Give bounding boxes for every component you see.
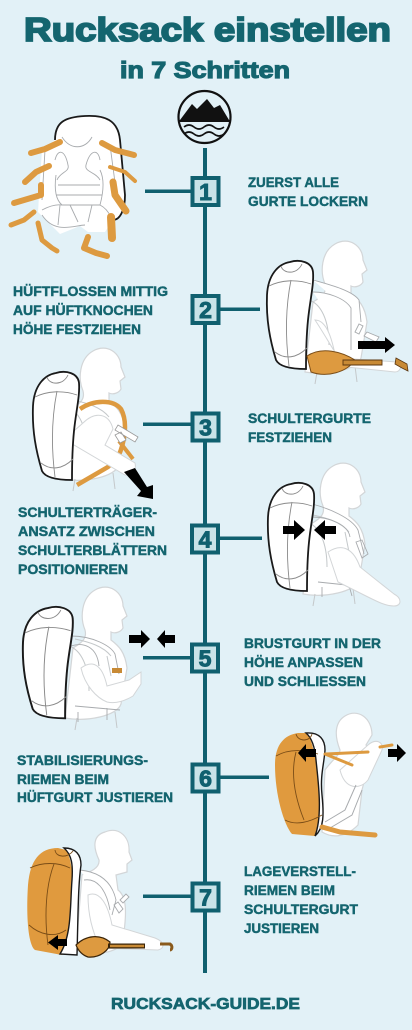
backpack seams [276,734,322,823]
step 1 text [248,175,368,209]
step 7 text: SCHULTERGURT [244,902,359,917]
backpack [268,483,314,591]
straps [312,504,368,597]
arm [328,548,400,606]
step 4 text: SCHULTERTRÄGER- [18,505,157,520]
strap end [380,745,392,747]
step 2 text: HÖHE FESTZIEHEN [13,322,141,337]
figure 7: orange pack and hip stabilizer [27,830,172,957]
backpack [23,607,73,718]
step 2 number box: 2 [199,297,212,323]
figure 1: backpack with loose straps [11,116,135,256]
backpack orange [275,733,323,836]
backpack white strip [306,733,325,836]
step 6 text: RIEMEN BEIM [17,772,109,787]
person silhouette [303,463,365,606]
person silhouette [305,241,367,384]
step 7 number box: 7 [199,884,212,910]
step 2 text: HÜFTFLOSSEN MITTIG [13,284,168,299]
step 5 text: BRUSTGURT IN DER [244,636,381,651]
arrow [358,337,395,353]
step 6 number box [192,764,218,792]
step 4 text [18,505,167,577]
strap [343,360,382,365]
arrows [129,630,175,648]
step 4 number box [192,526,218,552]
chest buckle [112,668,122,673]
buckle [115,425,138,443]
figure 5: chest strap [23,587,175,730]
step 5 number box [192,644,218,672]
timeline [203,148,207,973]
arrow [48,935,67,950]
step 4 number box: 4 [199,526,212,552]
step 2 text: AUF HÜFTKNOCHEN [13,303,153,318]
step 3 text: SCHULTERGURTE [248,411,371,426]
orange hip belt [307,351,355,374]
backpack [33,372,79,480]
figure 4: load position between shoulder blades [268,463,400,606]
step 4 text: POSITIONIEREN [18,562,128,577]
strap end [395,358,408,371]
step 5 number box: 5 [199,646,212,672]
arm [81,664,141,703]
step 5 text: HÖHE ANPASSEN [244,655,363,670]
step 4 text: ANSATZ ZWISCHEN [18,524,155,539]
step 6 number box: 6 [199,766,212,792]
arm [315,320,401,372]
step 3 text [248,411,371,445]
backpack seams [29,850,73,945]
straps and buckle [80,870,129,915]
orange hip belt [76,937,110,957]
person silhouette [322,713,372,836]
step 7 text: LAGEVERSTELL- [244,864,356,879]
step 3 number box [192,414,218,440]
subtitle: in 7 Schritten [120,57,290,83]
step 4 text: SCHULTERBLÄTTERN [18,543,167,558]
hip strap [108,944,145,948]
step 7 text: RIEMEN BEIM [244,883,335,898]
straps [71,636,120,722]
orange shoulder strap [77,402,125,485]
load lifter strap [325,752,368,765]
backpack orange [27,848,72,955]
step 5 text [244,636,381,689]
person silhouette [65,587,127,730]
hip strap [322,827,375,835]
frame straps [325,785,362,828]
connector lines [143,190,269,898]
footer website: RUCKSACK-GUIDE.DE [111,996,300,1013]
step 7 text: JUSTIEREN [244,921,319,936]
arm [88,894,163,950]
step 1 number box: 1 [199,179,212,205]
backpack white strip [60,848,81,955]
step 7 text [244,864,359,936]
figure 6: orange pack and load lifter [275,713,406,836]
step 1 number box [192,178,218,205]
second strap section [119,441,133,459]
figure 2: person tightening hip belt [267,241,408,384]
arrow [124,468,153,499]
step 6 text: HÜFTGURT JUSTIEREN [17,790,173,805]
step 5 text: UND SCHLIESSEN [244,674,366,689]
title: Rucksack einstellen [24,11,391,48]
step 7 number box [192,884,218,910]
step 2 text [13,284,168,337]
backpack [267,261,313,369]
step 3 text: FESTZIEHEN [248,430,332,445]
arrows [283,520,336,540]
step 6 text: STABILISIERUNGS- [17,753,148,768]
arm [67,415,135,475]
step 3 number box: 3 [199,414,212,440]
shoulder straps and buckle [313,280,379,350]
arm [340,741,382,787]
person silhouette [76,830,132,953]
step 1 text: GURTE LOCKERN [248,194,368,209]
figure 3: person tightening shoulder straps [33,348,153,499]
icon: mountain and water logo [178,91,230,143]
step 1 text: ZUERST ALLE [248,175,339,190]
strap end [160,944,172,950]
step 6 text [17,753,173,805]
step 2 number box [192,296,218,323]
arrows [298,744,406,762]
person silhouette [63,348,125,491]
strap fill [110,945,144,947]
